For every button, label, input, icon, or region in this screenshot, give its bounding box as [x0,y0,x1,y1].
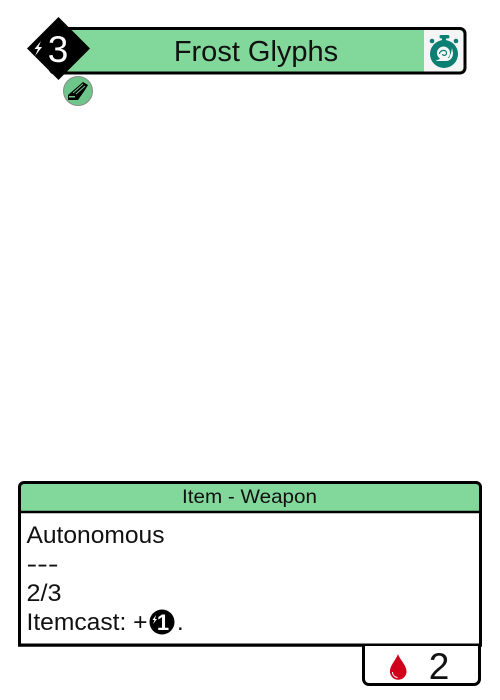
blood cost tab [364,646,480,687]
title: Frost Glyphs [174,36,338,68]
icon: energy cost 1: 1 [157,610,169,635]
rules text: Itemcast: + [26,609,148,636]
rules text [26,522,184,636]
rules text: Autonomous [26,522,164,549]
cost diamond [27,17,90,80]
blood cost number: 2 [429,646,449,687]
header bar [50,28,465,73]
rules panel [18,482,482,646]
icon: energy cost 1 [150,610,174,635]
icon: stopwatch with snail [430,35,458,68]
icon: lightning bolt [34,41,42,56]
rules text: . [177,609,184,636]
timing icon box [424,30,464,72]
icon: item type badge [64,76,92,106]
cost number: 3 [48,29,68,70]
rules text: 2/3 [26,580,62,607]
rules text: --- [26,551,58,578]
type line band [20,482,480,512]
icon: blood drop [390,654,406,680]
type line text: Item - Weapon [182,486,317,508]
